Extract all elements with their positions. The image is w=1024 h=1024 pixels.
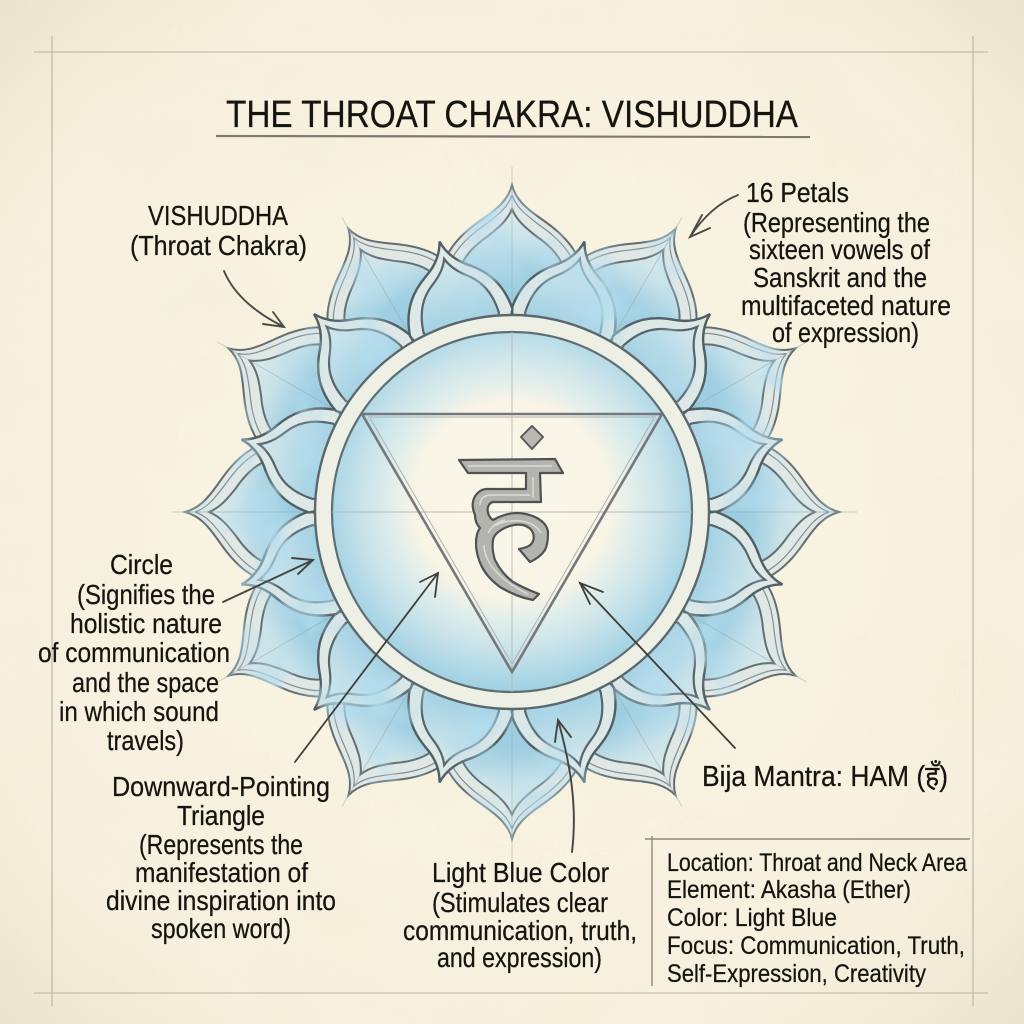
petal construction lines	[172, 167, 857, 862]
icon: bija mantra symbol	[459, 426, 563, 600]
label: downward-pointing triangle: divine inspiration into	[106, 885, 336, 916]
label: downward-pointing triangle: Downward-Pointing	[112, 771, 330, 802]
arrow: bija mantra	[580, 583, 735, 748]
chakra mandala	[172, 167, 857, 862]
label: 16 petals: 16 Petals	[746, 177, 849, 208]
label: circle	[38, 549, 230, 756]
label: downward-pointing triangle	[106, 771, 336, 944]
label: light blue color: (Stimulates clear	[432, 887, 608, 918]
label: light blue color: communication, truth,	[403, 915, 637, 946]
label: Vishuddha: VISHUDDHA	[148, 200, 289, 231]
label: 16 petals: sixteen vowels of	[749, 234, 930, 265]
arrow: light blue color	[555, 720, 574, 852]
panel: chakra facts: Self-Expression, Creativity	[667, 960, 926, 988]
label: 16 petals: multifaceted nature	[741, 290, 951, 321]
arrow: circle	[223, 558, 313, 602]
arrow: Vishuddha	[224, 271, 284, 327]
downward-pointing triangle	[362, 414, 662, 672]
label: light blue color	[403, 857, 637, 973]
ring outlines and disc	[315, 315, 709, 709]
label: circle: of communication	[38, 637, 230, 668]
label: circle: Circle	[110, 549, 173, 580]
label: light blue color: Light Blue Color	[432, 857, 609, 888]
label: circle: and the space	[72, 667, 219, 698]
label: circle: holistic nature	[70, 608, 222, 639]
outer petals	[185, 185, 839, 839]
label: circle: travels)	[107, 725, 184, 756]
panel: chakra facts: Color: Light Blue	[667, 904, 837, 932]
label: downward-pointing triangle: manifestation of	[135, 857, 308, 888]
label: 16 petals: (Representing the	[743, 207, 930, 238]
label: circle: in which sound	[59, 696, 219, 727]
label: Vishuddha	[130, 200, 307, 261]
panel: chakra facts: Location: Throat and Neck Area	[667, 849, 967, 877]
label: 16 petals	[741, 177, 951, 348]
label: circle: (Signifies the	[77, 579, 215, 610]
panel: chakra facts: Focus: Communication, Truth,	[667, 932, 965, 960]
inner petals	[228, 228, 796, 796]
label: bija mantra: Bija Mantra: HAM (हँ)	[702, 760, 948, 793]
label: 16 petals: Sanskrit and the	[753, 262, 927, 293]
arrow: triangle	[295, 573, 438, 762]
label: 16 petals: of expression)	[772, 317, 919, 348]
outer ring	[324, 324, 700, 700]
label: Vishuddha: (Throat Chakra)	[130, 230, 307, 261]
title: THE THROAT CHAKRA: VISHUDDHA	[226, 94, 799, 136]
panel: chakra facts: Element: Akasha (Ether)	[667, 876, 911, 904]
panel: chakra facts	[645, 836, 970, 988]
arrow: 16 petals	[690, 195, 738, 237]
label: downward-pointing triangle: spoken word)	[151, 913, 291, 944]
label: light blue color: and expression)	[437, 942, 602, 973]
label: downward-pointing triangle: Triangle	[177, 800, 265, 831]
label: downward-pointing triangle: (Represents the	[139, 829, 303, 860]
